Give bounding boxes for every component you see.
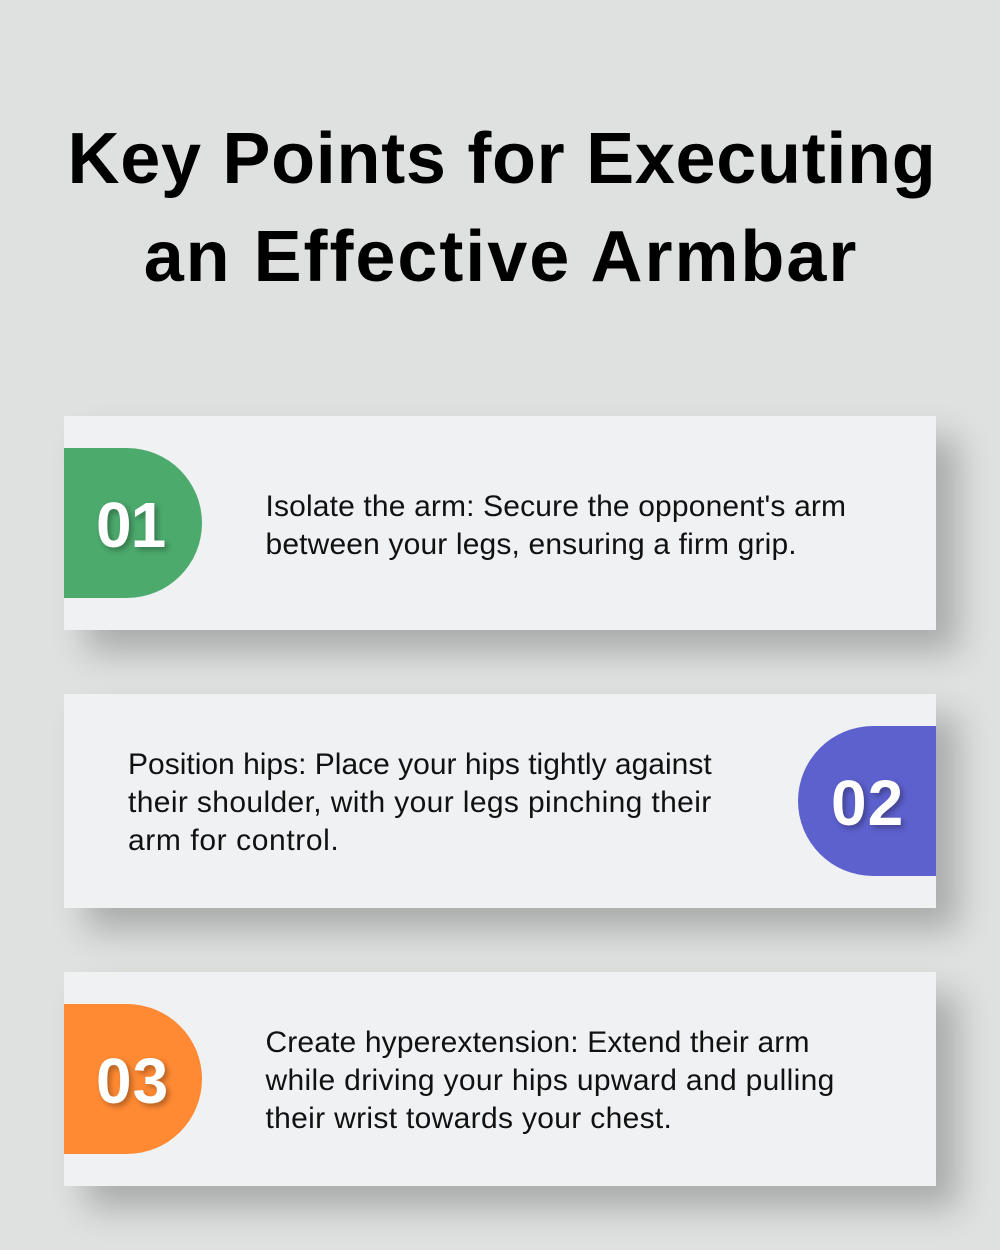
text: step 1 description: Isolate the arm: Secure the opponent's arm <box>266 490 846 523</box>
title <box>68 119 936 297</box>
title: an Effective Armbar <box>144 217 858 297</box>
badge: 02: 02 <box>831 767 904 839</box>
badge: 01 <box>64 448 202 598</box>
text: step 3 description: their wrist towards your chest. <box>266 1102 672 1135</box>
badge: 03 <box>64 1004 202 1154</box>
text: step 3 description <box>266 1026 835 1135</box>
text: step 2 description: Position hips: Place your hips tightly against <box>128 748 712 781</box>
text: step 2 description: their shoulder, with your legs pinching their <box>128 786 712 819</box>
panel: step 1 <box>64 416 936 630</box>
badge: 02 <box>798 726 936 876</box>
text: step 1 description <box>266 490 846 561</box>
text: step 2 description: arm for control. <box>128 824 339 857</box>
title: Key Points for Executing <box>68 119 936 199</box>
badge: 01: 01 <box>96 489 165 561</box>
panel: step 3 <box>64 972 936 1186</box>
text: step 1 description: between your legs, ensuring a firm grip. <box>266 528 797 561</box>
text: step 3 description: while driving your hips upward and pulling <box>266 1064 835 1097</box>
text: step 3 description: Create hyperextension: Extend their arm <box>266 1026 810 1059</box>
text: step 2 description <box>128 748 712 857</box>
panel: step 2 <box>64 694 936 908</box>
badge: 03: 03 <box>96 1045 169 1117</box>
